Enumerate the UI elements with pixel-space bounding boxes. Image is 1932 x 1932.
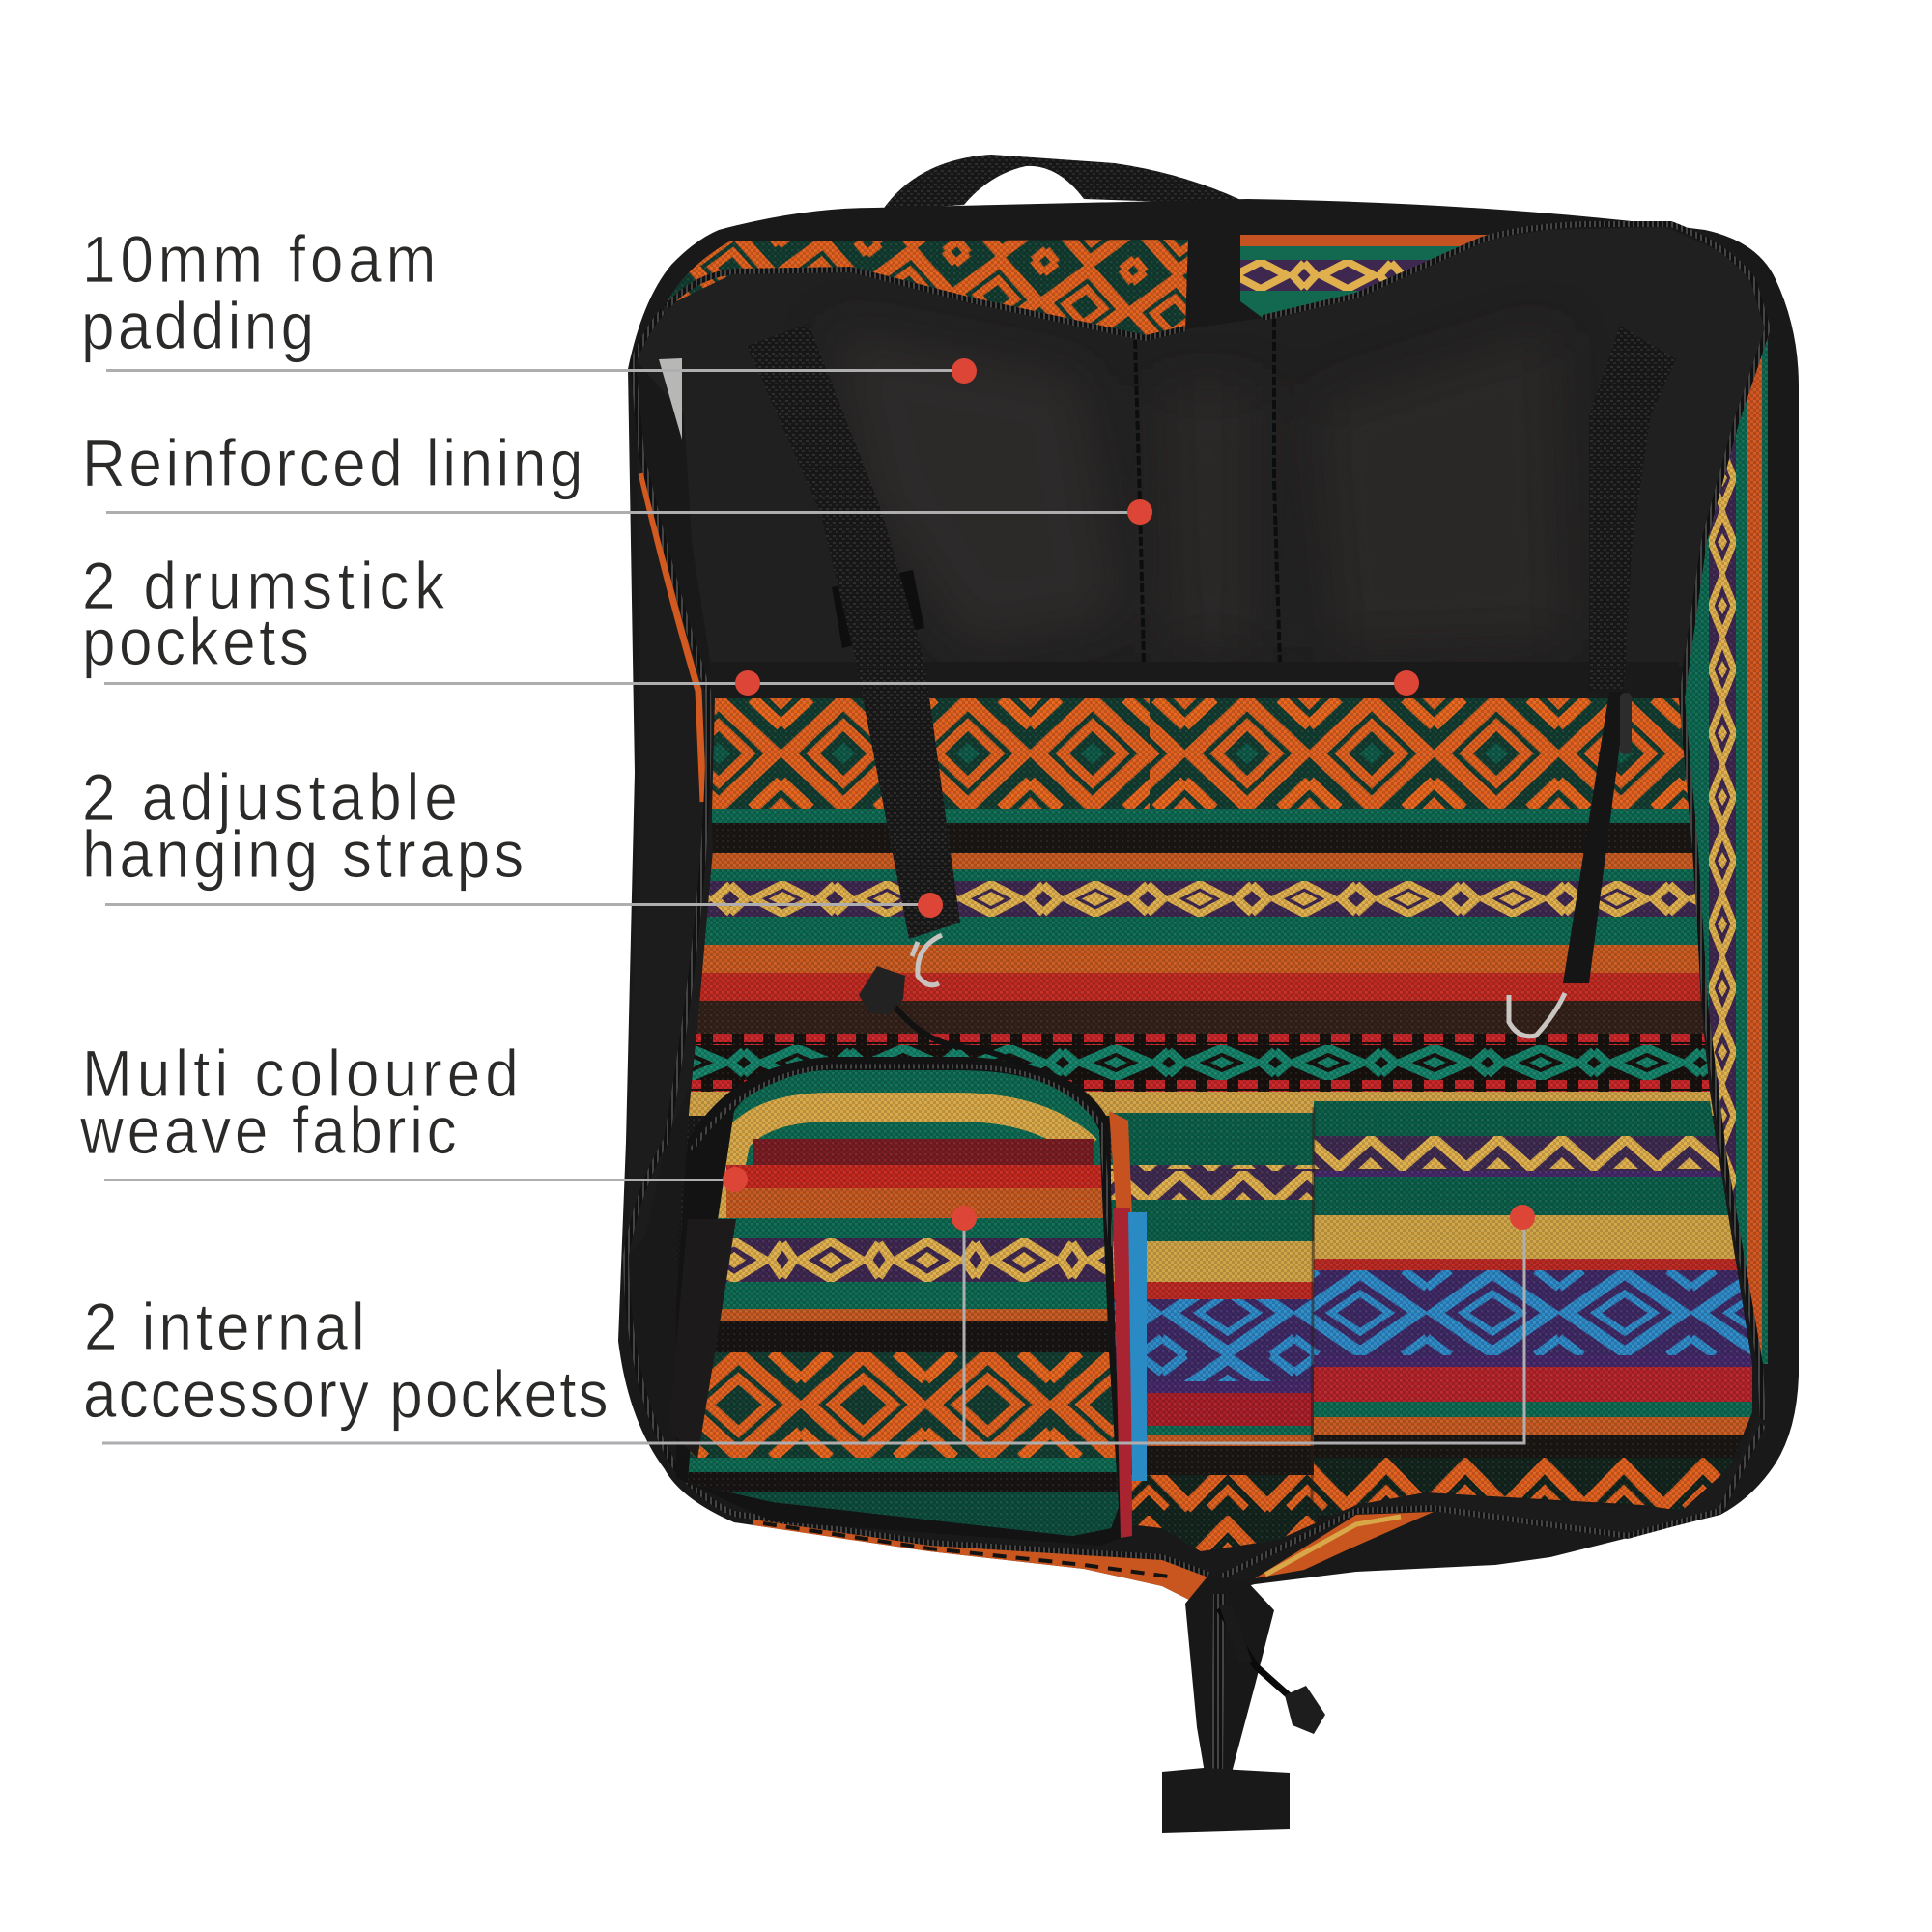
label: 2 drumstick pockets — [82, 549, 444, 679]
label: 2 internal accessory pockets: 2 internal — [84, 1290, 365, 1364]
foam corner — [659, 358, 682, 440]
callout: 2 drumstick pockets — [82, 549, 1419, 696]
label: reinforced lining: Reinforced lining — [82, 426, 582, 500]
bottom zipper tail — [1162, 1577, 1325, 1833]
small accessory pocket — [668, 1057, 1147, 1546]
leader line — [105, 903, 930, 906]
label: 2 adjustable hanging straps: 2 adjustable — [82, 760, 458, 835]
bottom left rim fabric — [753, 1520, 1208, 1602]
label: multi coloured weave fabric: Multi coloured — [82, 1037, 519, 1111]
marker dot left — [735, 670, 760, 696]
zipper pull and toggle — [1219, 1604, 1325, 1734]
left hanging strap — [747, 324, 960, 939]
bottom right black edge — [1249, 1412, 1766, 1565]
pocket fabric stripes — [688, 1070, 1119, 1536]
left strap buckle — [832, 570, 924, 648]
callout: multi coloured weave fabric — [79, 1037, 748, 1192]
lower right pocket fabric — [1314, 1101, 1768, 1516]
leader lines — [102, 1217, 1524, 1443]
label: 2 drumstick pockets: 2 drumstick — [82, 549, 444, 623]
marker dot right — [1510, 1205, 1535, 1230]
marker dot right — [1394, 670, 1419, 696]
callout: 10mm foam padding — [81, 222, 977, 384]
right strap buckle — [1620, 693, 1632, 754]
bottom right rim fabric — [1255, 1512, 1434, 1578]
label: multi coloured weave fabric: weave fabric — [79, 1094, 457, 1168]
marker dot — [1127, 499, 1152, 525]
callout: 2 adjustable hanging straps — [82, 760, 943, 918]
top left fabric flap — [665, 240, 1188, 338]
callout: 2 internal accessory pockets — [83, 1205, 1535, 1443]
label: 2 adjustable hanging straps — [82, 760, 524, 892]
marker dot — [723, 1167, 748, 1192]
left zipper — [626, 311, 1208, 1575]
carry handle — [882, 155, 1251, 211]
callout: reinforced lining — [82, 426, 1152, 525]
bottom right zipper teeth — [1222, 1425, 1763, 1577]
lower left fabric column — [1111, 1113, 1318, 1562]
pocket zipper surround — [676, 1057, 1124, 1546]
pocket left binding — [668, 1219, 736, 1459]
label: 10mm foam padding — [81, 222, 436, 363]
right metal hook — [1509, 993, 1565, 1037]
label: 2 drumstick pockets: pockets — [82, 605, 309, 679]
label: 2 internal accessory pockets: accessory pockets — [83, 1357, 609, 1432]
right hanging strap — [1563, 326, 1676, 983]
bag photo illustration — [618, 155, 1799, 1833]
top flap zipper — [667, 224, 1768, 1420]
zip pull with cord — [859, 966, 1038, 1074]
black stick pocket hem — [711, 662, 1679, 698]
leader line — [106, 369, 964, 372]
leader line — [104, 1179, 735, 1181]
label: 2 adjustable hanging straps: hanging straps — [82, 817, 524, 892]
leader line — [104, 682, 1406, 685]
left orange side strip — [641, 473, 703, 802]
label: 10mm foam padding: 10mm foam — [82, 222, 436, 297]
outer bag shell — [618, 199, 1799, 1602]
pocket zipper teeth — [692, 1066, 1111, 1246]
marker dot left — [952, 1206, 977, 1231]
side gusset strip — [1109, 1111, 1147, 1538]
leather end tab — [1162, 1768, 1290, 1833]
left hanger ring — [912, 935, 942, 985]
marker dot — [952, 358, 977, 384]
label: 2 internal accessory pockets — [83, 1290, 609, 1432]
leader line — [106, 511, 1140, 514]
main woven fabric panel — [667, 698, 1768, 1568]
marker dot — [918, 893, 943, 918]
lining sheen — [831, 328, 1565, 647]
label: 10mm foam padding: padding — [81, 289, 314, 363]
lining seams — [1135, 319, 1280, 662]
black lining panel — [634, 227, 1768, 667]
black left binding — [628, 454, 713, 1256]
top right fabric flap — [1240, 235, 1492, 318]
right side woven strip — [1685, 338, 1768, 1364]
label: multi coloured weave fabric — [79, 1037, 519, 1168]
